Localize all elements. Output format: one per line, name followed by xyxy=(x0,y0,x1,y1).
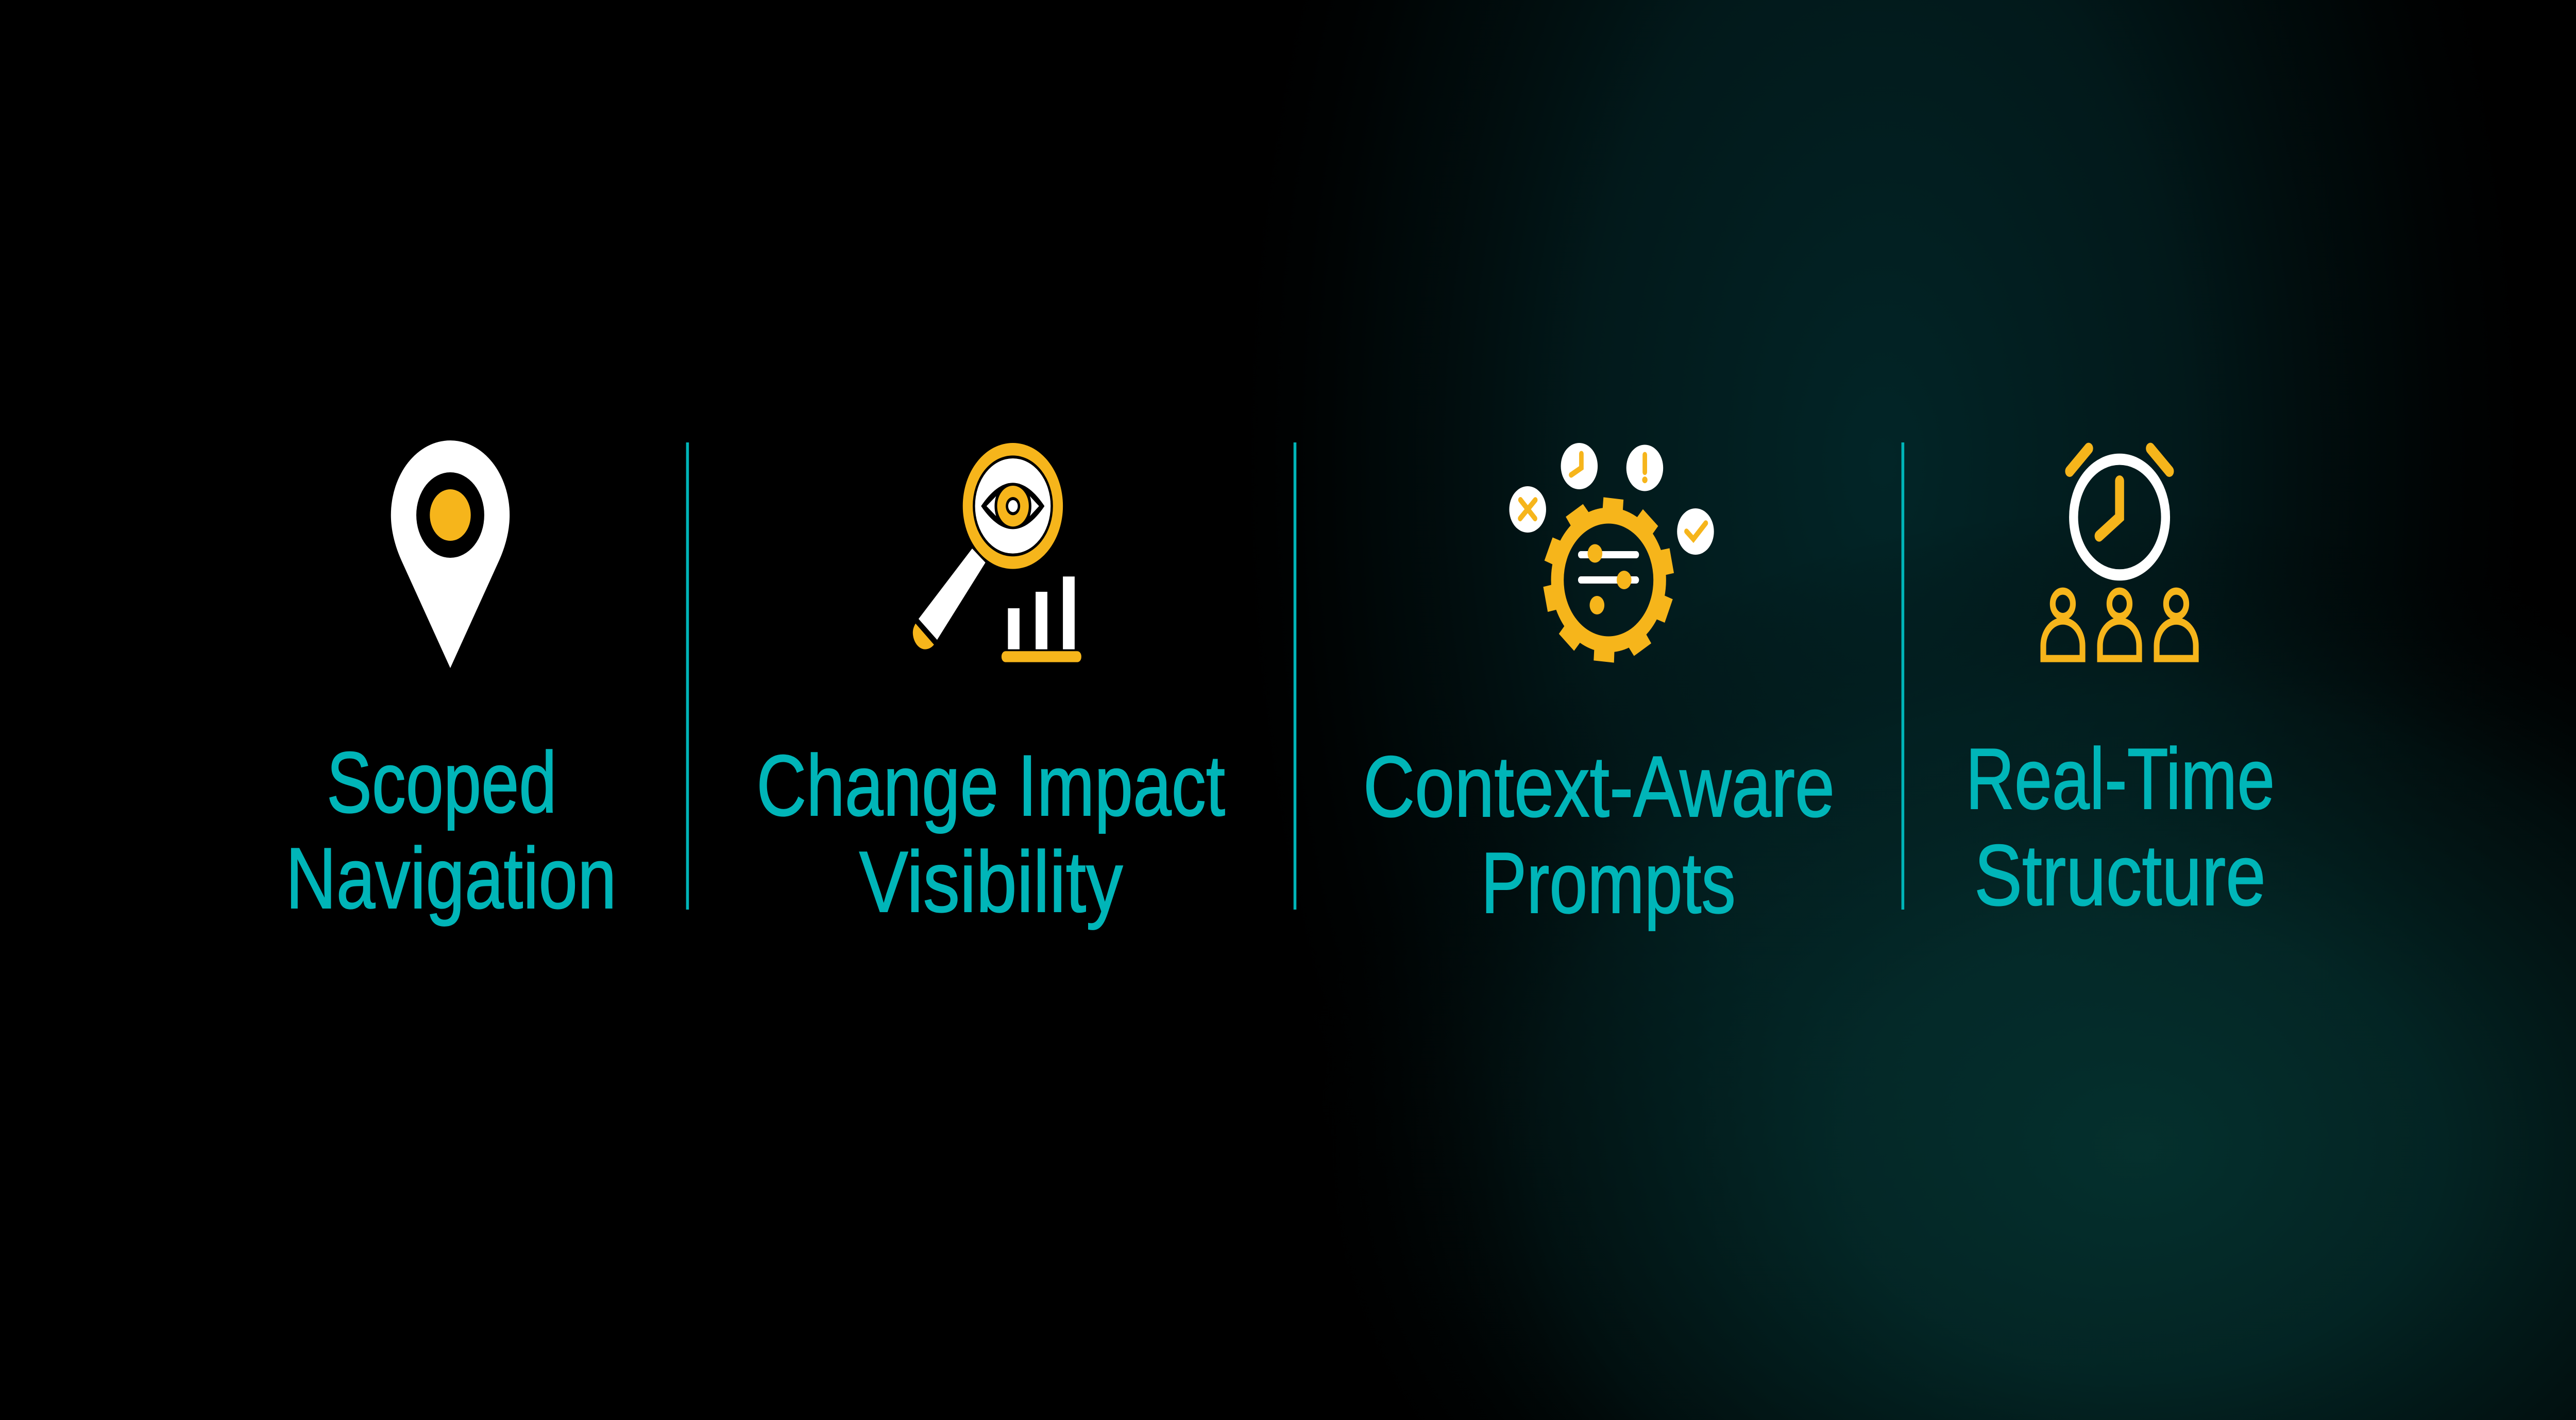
heading: Context-Aware Prompts: Context-Aware xyxy=(1363,739,1835,835)
heading: Context-Aware Prompts: Prompts xyxy=(1481,835,1736,932)
bubble: check xyxy=(1677,508,1714,555)
heading: Real-Time Structure: Real-Time xyxy=(1965,731,2275,828)
sliders xyxy=(1578,544,1639,614)
heading: Change Impact Visibility xyxy=(756,738,1225,931)
divider 3 xyxy=(1902,442,1904,910)
divider 1 xyxy=(686,442,689,910)
heading: Scoped Navigation: Scoped xyxy=(327,734,557,831)
icon: magnifier with eye and bar chart xyxy=(913,443,1081,662)
heading: Scoped Navigation xyxy=(286,734,617,927)
heading: Context-Aware Prompts xyxy=(1363,739,1835,932)
heading: Real-Time Structure xyxy=(1965,731,2275,924)
panel: context-aware prompts xyxy=(1363,443,1835,932)
divider 2 xyxy=(1294,442,1296,910)
icon: location pin xyxy=(391,440,510,668)
gear xyxy=(1543,497,1674,663)
bubble: clock xyxy=(1561,443,1598,489)
panel: change impact visibility xyxy=(756,443,1225,931)
icon: alarm clock with people xyxy=(2043,449,2196,659)
heading: Scoped Navigation: Navigation xyxy=(286,830,617,927)
heading: Change Impact Visibility: Visibility xyxy=(859,834,1123,931)
panel: real-time structure xyxy=(1965,449,2275,924)
panel: scoped navigation xyxy=(286,440,617,927)
bubble: cross xyxy=(1509,486,1546,533)
icon: gear with sliders and status bubbles xyxy=(1509,443,1714,663)
bubble: exclamation xyxy=(1626,445,1663,491)
heading: Real-Time Structure: Structure xyxy=(1974,827,2266,924)
heading: Change Impact Visibility: Change Impact xyxy=(756,738,1225,834)
